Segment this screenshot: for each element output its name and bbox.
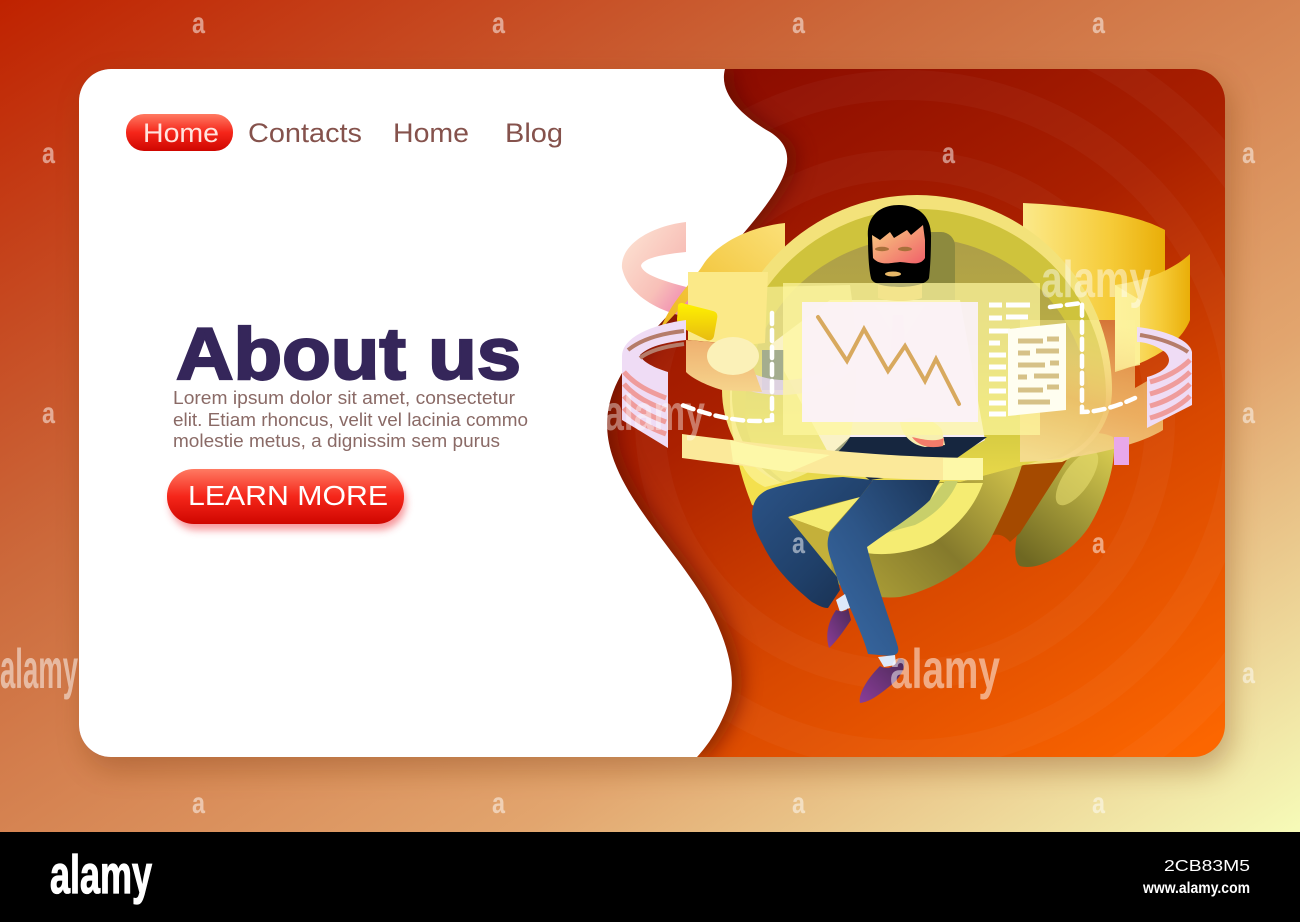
left belt peach: [686, 340, 762, 392]
wrist hand: [707, 337, 759, 375]
seat side shade: [788, 517, 832, 575]
shoe back: [827, 608, 851, 648]
card shadow: [85, 80, 1231, 770]
sleeve dark: [762, 350, 784, 390]
dashed connector left: [682, 313, 772, 421]
nav item: Contacts: Contacts: [248, 118, 362, 148]
sock back: [836, 594, 850, 612]
alamy watermarks: alamy: [0, 637, 78, 700]
alamy watermarks: a: [1242, 657, 1255, 690]
illustration: man with virtual screens: [622, 195, 1192, 703]
body text: Lorem ipsum dolor sit amet, consectetur: [173, 388, 515, 408]
dashed connector right: [1050, 303, 1135, 412]
image id: 2CB83M5: [1164, 858, 1250, 875]
navigation bar: [126, 114, 563, 151]
lilac arm: [736, 340, 862, 395]
left leg: [752, 477, 873, 608]
right belt peach panel: [1020, 320, 1163, 462]
body text: [173, 388, 528, 451]
alamy watermarks: a: [42, 397, 55, 430]
alamy watermarks: a: [792, 7, 805, 40]
alamy watermarks: a: [792, 787, 805, 820]
forward hand: [900, 417, 945, 447]
nav active pill: [126, 114, 233, 151]
black footer band: [0, 832, 1300, 922]
learn more button: [167, 469, 406, 530]
shadow of white shape: [607, 69, 804, 757]
torso: [770, 300, 985, 462]
translucent body glow: [730, 285, 856, 487]
right pale panels: [1115, 285, 1140, 370]
footer logo: alamy: [50, 845, 152, 905]
alamy watermarks: a: [1242, 137, 1255, 170]
sphere ring: [732, 209, 1106, 482]
alamy watermarks: a: [492, 787, 505, 820]
alamy watermarks: a: [942, 137, 955, 170]
white content area: [79, 69, 787, 757]
rear ribbon: pink ring: [622, 222, 690, 318]
text lines on screen: [989, 305, 1030, 414]
suit jacket lower: [830, 437, 987, 480]
neck: [878, 280, 922, 301]
nav item: Home active: Home: [143, 118, 219, 148]
body text: elit. Etiam rhoncus, velit vel lacinia commo: [173, 410, 528, 430]
chair shadow gap: [982, 455, 1070, 542]
sock front: [878, 655, 896, 667]
belt end highlight: [943, 458, 983, 480]
heading: About us: [176, 314, 521, 395]
alamy watermarks: a: [1092, 527, 1105, 560]
tie: [890, 315, 906, 362]
chair seat left yellow: [788, 497, 860, 532]
forward hand palm: [912, 437, 944, 447]
alamy watermarks: a: [1092, 787, 1105, 820]
olive chair arm: [1015, 433, 1114, 567]
alamy watermarks: alamy: [1041, 251, 1151, 309]
collar: [875, 305, 925, 345]
nav item: Blog: Blog: [505, 118, 563, 148]
alamy watermarks: a: [492, 7, 505, 40]
shoe front: [860, 658, 904, 703]
website: www.alamy.com: [1142, 880, 1250, 897]
left belt pale panel: [688, 272, 768, 345]
person: [752, 205, 987, 703]
pink tab: [1114, 437, 1129, 465]
concentric background rings: [495, 10, 1300, 830]
alamy watermarks: a: [792, 527, 805, 560]
panel: landing page card: [79, 69, 1225, 757]
alamy watermarks: a: [1242, 397, 1255, 430]
front belt ribbon: [682, 434, 983, 480]
alamy watermarks: alamy: [604, 385, 705, 441]
eyes: [875, 247, 912, 251]
rear ribbon: right gold: [1023, 203, 1165, 320]
right leg: [828, 480, 940, 656]
lower sphere yellow: [732, 430, 860, 520]
gadget: [677, 303, 717, 340]
chart panel: [802, 302, 978, 422]
alamy watermarks: a: [192, 787, 205, 820]
document card: [1008, 323, 1066, 416]
seat green strip: [866, 481, 958, 541]
belt overlap highlight: [730, 440, 830, 472]
falling line chart: [818, 317, 959, 404]
chair body: [790, 455, 1025, 598]
hair and beard: [868, 205, 931, 287]
face: [872, 225, 925, 263]
rear ribbon: left gold: [660, 223, 785, 330]
central screen panel: [783, 283, 1040, 435]
learn more button: LEARN MORE: [188, 480, 388, 511]
head shadow on sphere: [905, 232, 955, 317]
alamy watermarks: alamy: [890, 637, 1000, 700]
alamy watermarks: a: [192, 7, 205, 40]
alamy watermarks: a: [42, 137, 55, 170]
left striped ring: [622, 320, 686, 448]
chair arm highlight: [1048, 444, 1106, 512]
body text: molestie metus, a dignissim sem purus: [173, 431, 500, 451]
sphere outer rim: [722, 195, 1112, 482]
mouth: [885, 272, 901, 276]
right striped ring: [1137, 327, 1192, 428]
nav item: Home: Home: [393, 118, 469, 148]
chair seat right yellow: [865, 483, 983, 554]
rear ribbon: right gold lower: [1115, 254, 1190, 372]
alamy watermarks: a: [1092, 7, 1105, 40]
sphere inner: [745, 238, 1090, 482]
